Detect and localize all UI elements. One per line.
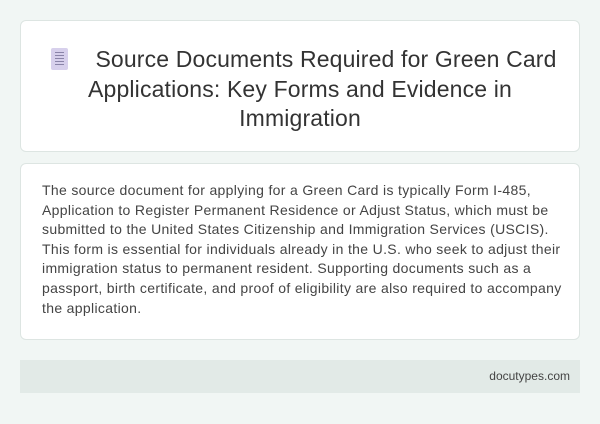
title: Source Documents Required for Green Card Applications: Key Forms and Evidence in Immigration: [88, 46, 557, 131]
body text: The source document for applying for a Green Card is typically Form I-485, Application to Register Permanent Residence or Adjust Status, which must be submitted to the United States Citizenship and Immigration Services (USCIS). This form is essential for individuals already in the U.S. who seek to adjust their immigration status to permanent resident. Supporting documents such as a passport, birth certificate, and proof of eligibility are also required to accompany the application.: [42, 182, 562, 316]
title card: [20, 20, 580, 152]
icon: document: [51, 48, 68, 70]
footer text: docutypes.com: [489, 369, 570, 383]
description card: [20, 163, 580, 340]
footer: [20, 360, 580, 393]
